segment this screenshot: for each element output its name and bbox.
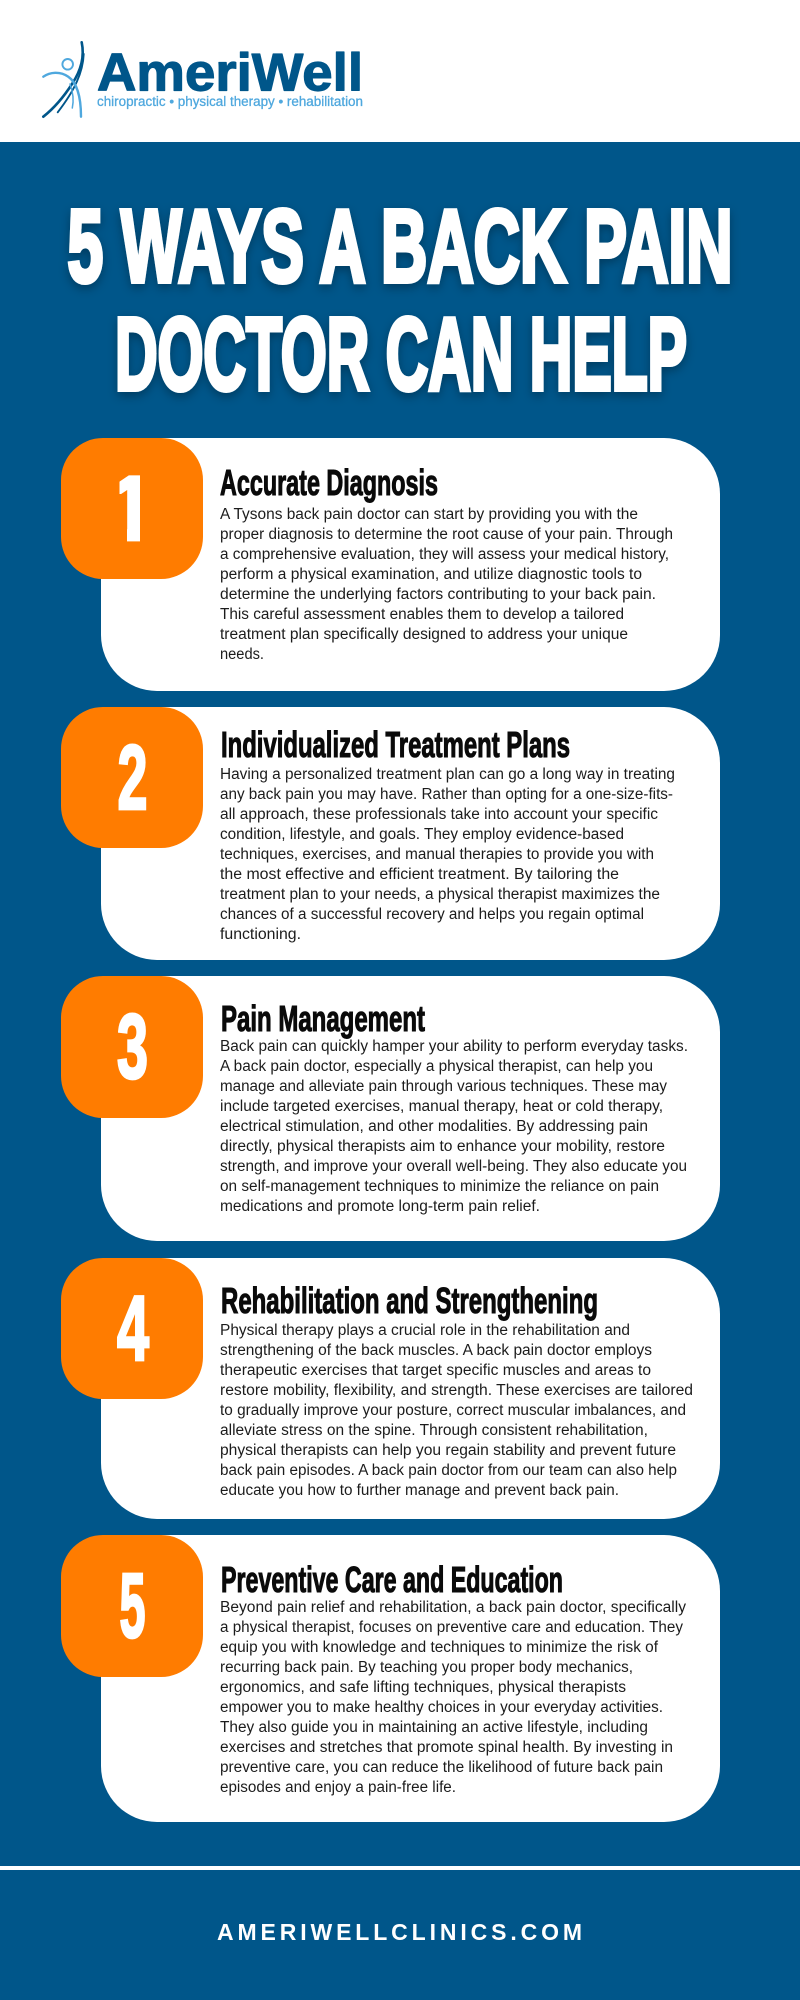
- body text: functioning.: [220, 926, 301, 943]
- body text: on self-management techniques to minimize the reliance on pain: [220, 1178, 659, 1195]
- body text: all approach, these professionals take into account your specific: [220, 806, 658, 823]
- body text: a comprehensive evaluation, they will assess your medical history,: [220, 546, 669, 563]
- body text: recurring back pain. By teaching you proper body mechanics,: [220, 1659, 633, 1676]
- body text: alleviate stress on the spine. Through consistent rehabilitation,: [220, 1422, 648, 1439]
- panel: step 5: [61, 1535, 720, 1822]
- body text: the most effective and efficient treatment. By tailoring the: [220, 866, 619, 883]
- header band with logo: [0, 0, 800, 142]
- body text: techniques, exercises, and manual therapies to provide you with: [220, 846, 654, 863]
- body text: treatment plan to your needs, a physical therapist maximizes the: [220, 886, 660, 903]
- number badge 1: 1: [108, 458, 157, 560]
- number badge 5: [61, 1535, 203, 1677]
- body text: equip you with knowledge and techniques to minimize the risk of: [220, 1639, 659, 1656]
- number badge 2: [61, 707, 203, 848]
- body text: proper diagnosis to determine the root cause of your pain. Through: [220, 526, 673, 543]
- body text: include targeted exercises, manual therapy, heat or cold therapy,: [220, 1098, 663, 1115]
- body text: perform a physical examination, and utilize diagnostic tools to: [220, 566, 642, 583]
- body text: [220, 506, 673, 663]
- number badge 4: [61, 1258, 203, 1399]
- body text: Back pain can quickly hamper your ability to perform everyday tasks.: [220, 1038, 688, 1055]
- body text: strengthening of the back muscles. A back pain doctor employs: [220, 1342, 652, 1359]
- body text: A back pain doctor, especially a physical therapist, can help you: [220, 1058, 653, 1075]
- body text: [220, 1038, 688, 1215]
- body text: back pain episodes. A back pain doctor from our team can also help: [220, 1462, 677, 1479]
- number badge 3: 3: [117, 996, 148, 1098]
- body text: determine the underlying factors contributing to your back pain.: [220, 586, 656, 603]
- body text: needs.: [220, 646, 264, 663]
- body text: educate you how to further manage and prevent back pain.: [220, 1482, 619, 1499]
- body text: Having a personalized treatment plan can go a long way in treating: [220, 766, 675, 783]
- panel: step 3: [61, 976, 720, 1241]
- panel: step 4: [61, 1258, 720, 1519]
- body text: to gradually improve your posture, correct muscular imbalances, and: [220, 1402, 686, 1419]
- heading: Individualized Treatment Plans: [221, 724, 570, 765]
- heading: Pain Management: [221, 998, 425, 1039]
- body text: exercises and stretches that promote spinal health. By investing in: [220, 1739, 673, 1756]
- footer website: AMERIWELLCLINICS.COM: [217, 1919, 582, 1945]
- icon: AmeriWell figure: [43, 42, 84, 117]
- body text: chances of a successful recovery and helps you regain optimal: [220, 906, 644, 923]
- body text: empower you to make healthy choices in your everyday activities.: [220, 1699, 663, 1716]
- body text: They also guide you in maintaining an active lifestyle, including: [220, 1719, 648, 1736]
- body text: ergonomics, and safe lifting techniques, physical therapists: [220, 1679, 626, 1696]
- body text: strength, and improve your overall well-being. They also educate you: [220, 1158, 687, 1175]
- number badge 3: [61, 976, 203, 1118]
- body text: [220, 766, 675, 943]
- logo tagline: chiropractic • physical therapy • rehabilitation: [97, 94, 363, 109]
- body text: condition, lifestyle, and goals. They employ evidence-based: [220, 826, 624, 843]
- number badge 1: [61, 438, 203, 579]
- body text: electrical stimulation, and other modalities. By addressing pain: [220, 1118, 648, 1135]
- body text: A Tysons back pain doctor can start by providing you with the: [220, 506, 638, 523]
- heading: Rehabilitation and Strengthening: [221, 1280, 598, 1321]
- body text: [220, 1599, 686, 1796]
- body text: [220, 1322, 693, 1499]
- body text: physical therapists can help you regain stability and prevent future: [220, 1442, 676, 1459]
- body text: preventive care, you can reduce the likelihood of future back pain: [220, 1759, 663, 1776]
- title: [68, 188, 732, 412]
- body text: manage and alleviate pain through various techniques. These may: [220, 1078, 667, 1095]
- body text: therapeutic exercises that target specific muscles and areas to: [220, 1362, 651, 1379]
- number badge 4: 4: [117, 1278, 149, 1380]
- heading: Accurate Diagnosis: [220, 462, 438, 503]
- number badge 5: 5: [120, 1555, 146, 1657]
- heading: Preventive Care and Education: [221, 1559, 563, 1600]
- body text: episodes and enjoy a pain-free life.: [220, 1779, 456, 1796]
- panel: step 2: [61, 707, 720, 960]
- body text: any back pain you may have. Rather than opting for a one-size-fits-: [220, 786, 673, 803]
- logo wordmark: AmeriWell: [97, 44, 363, 102]
- body text: treatment plan specifically designed to address your unique: [220, 626, 628, 643]
- body text: This careful assessment enables them to develop a tailored: [220, 606, 624, 623]
- body text: Physical therapy plays a crucial role in the rehabilitation and: [220, 1322, 630, 1339]
- body text: Beyond pain relief and rehabilitation, a back pain doctor, specifically: [220, 1599, 686, 1616]
- body text: a physical therapist, focuses on preventive care and education. They: [220, 1619, 683, 1636]
- panel: step 1: [61, 438, 720, 691]
- body text: medications and promote long-term pain relief.: [220, 1198, 540, 1215]
- body text: restore mobility, flexibility, and strength. These exercises are tailored: [220, 1382, 693, 1399]
- number badge 2: 2: [118, 727, 148, 829]
- body text: directly, physical therapists aim to enhance your mobility, restore: [220, 1138, 665, 1155]
